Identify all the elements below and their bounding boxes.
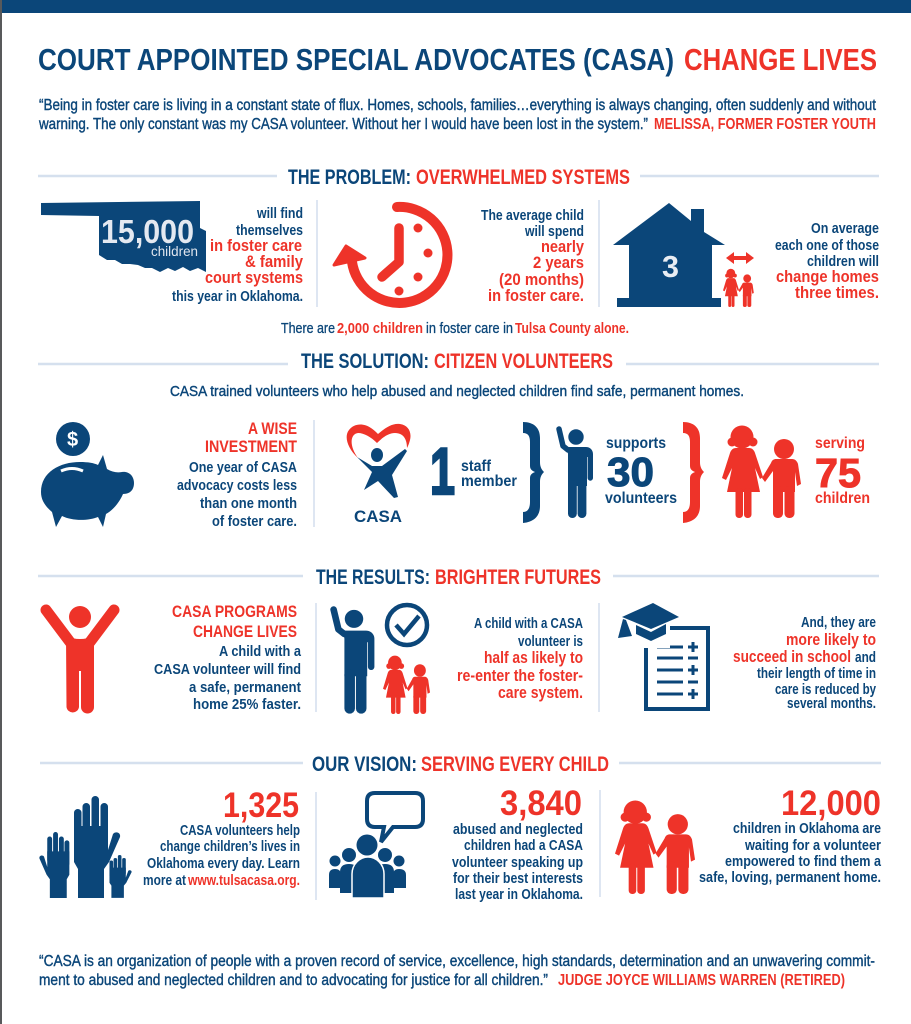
panel: time in care: [334, 207, 585, 305]
text: succeed in school: And, they are: [801, 615, 876, 631]
text: programs change lives: [154, 603, 302, 713]
panel: 15,000 children: [41, 201, 304, 305]
section heading: the solution: CITIZEN VOLUNTEERS: [434, 350, 613, 373]
intro quote: warning. The only constant was my CASA volunteer. Without her I would have been lost in the system.”: [38, 116, 648, 133]
text: three moves: change homes: [776, 268, 879, 286]
text: programs change lives: A child with a: [219, 644, 302, 660]
icon: navy brace: [523, 422, 544, 523]
icon: group with speech bubble: [329, 793, 423, 898]
Tulsa County note: There are: [281, 321, 335, 337]
statistic: 1,325: 1,325: [223, 786, 299, 825]
solution summary: CASA trained volunteers who help abused and neglected children find safe, permanent homes.: [170, 384, 744, 400]
text: succeed in school: and: [855, 650, 876, 666]
text: three moves: each one of those: [775, 238, 879, 254]
icon: person with arms raised: [46, 606, 114, 714]
text: succeed in school: care is reduced by: [775, 682, 876, 698]
intro quote: [38, 97, 877, 133]
text: 20 months: in foster care.: [488, 287, 584, 305]
text: foster care: & family: [245, 253, 304, 271]
text: half as likely: half as likely to: [484, 649, 583, 667]
text: 20 months: nearly: [541, 238, 585, 256]
Tulsa County note: 2,000 children: [337, 321, 423, 337]
icon: raised hands: [39, 796, 132, 898]
text: 20 months: The average child: [481, 208, 584, 224]
icon: double arrow: [726, 252, 754, 264]
text: foster care: in foster care: [210, 237, 302, 255]
section heading: our vision: SERVING EVERY CHILD: [421, 753, 609, 776]
text: speaking up: [452, 822, 583, 903]
text: foster care: will find: [256, 206, 303, 222]
Tulsa County note: [281, 321, 629, 337]
logo: CASA: [347, 424, 411, 526]
icon: children: [615, 800, 695, 894]
icon: children: [722, 426, 801, 518]
text: 20 months: (20 months): [499, 271, 584, 289]
icon: volunteer: [334, 610, 374, 714]
section heading: the solution: THE SOLUTION:: [301, 350, 429, 373]
closing quote: JUDGE JOYCE WILLIAMS WARREN (RETIRED): [558, 972, 845, 989]
text: children waiting: children in Oklahoma are: [733, 821, 881, 837]
text: succeed in school: succeed in school: [733, 648, 851, 666]
section heading: the results: [38, 566, 879, 589]
text: programs change lives: home 25% faster.: [193, 697, 301, 713]
text: speaking up: abused and neglected: [453, 822, 583, 838]
text: children waiting: empowered to find them a: [725, 854, 882, 870]
text: 20 months: [481, 208, 585, 305]
text: three moves: three times.: [795, 284, 879, 302]
statistic: 1 staff member: 1: [430, 434, 455, 508]
text: programs change lives: CASA volunteer will find: [154, 662, 301, 678]
section heading: the results: THE RESULTS:: [316, 566, 430, 589]
title: CHANGE LIVES: [684, 42, 877, 77]
icon: house: 3: [662, 249, 679, 284]
panel: half as likely: [334, 605, 583, 714]
statistic: 15,000 children: 15,000: [101, 213, 194, 250]
icon: children: [723, 269, 754, 307]
text: foster care: this year in Oklahoma.: [172, 289, 303, 305]
icon: red brace: [683, 422, 704, 523]
text: children waiting: [699, 821, 882, 886]
statistic: 15,000 children: children: [151, 244, 198, 259]
text: programs change lives: a safe, permanent: [189, 680, 301, 696]
Tulsa County note: in foster care in: [426, 321, 513, 337]
text: half as likely: care system.: [498, 684, 583, 702]
text: speaking up: volunteer speaking up: [452, 855, 583, 871]
text: wise investment: One year of CASA: [189, 460, 297, 476]
text: half as likely: [457, 616, 583, 702]
statistic: 30 volunteers: supports: [606, 435, 666, 452]
text: programs change lives: CASA PROGRAMS: [172, 603, 297, 621]
icon: piggy bank and coin: $: [67, 429, 78, 451]
statistic: 12,000: 12,000: [781, 784, 881, 823]
section heading: the problem: OVERWHELMED SYSTEMS: [416, 166, 630, 189]
statistic: 30 volunteers: 30: [607, 449, 654, 495]
title: COURT APPOINTED SPECIAL ADVOCATES (CASA): [38, 42, 674, 77]
text: wise investment: [177, 420, 297, 530]
panel: 12,000 waiting: [615, 784, 882, 894]
panel: success in school: [618, 603, 876, 712]
section heading: the problem: THE PROBLEM:: [288, 166, 411, 189]
statistic: 1 staff member: member: [461, 473, 517, 490]
text: succeed in school: several months.: [787, 696, 876, 712]
text: three moves: On average: [811, 221, 879, 237]
text: succeed in school: [733, 615, 876, 712]
text: children waiting: waiting for a volunteer: [744, 838, 881, 854]
text: half as likely: volunteer is: [518, 634, 583, 650]
closing quote: [39, 953, 875, 989]
icon: clock with return arrow: [334, 207, 447, 303]
panel: 3,840 children: [329, 784, 583, 903]
icon: piggy bank and coin: [41, 422, 134, 527]
text: wise investment: of foster care.: [212, 514, 297, 530]
statistic: 3,840: 3,840: [500, 784, 582, 823]
panel: programs change lives: [46, 603, 302, 714]
text: speaking up: last year in Oklahoma.: [455, 887, 583, 903]
text: succeed in school: more likely to: [786, 631, 876, 649]
statistic: 75 children: 75: [815, 450, 861, 496]
text: wise investment: advocacy costs less: [177, 478, 297, 494]
text: foster care: themselves: [236, 223, 303, 239]
text: volunteers help: www.tulsacasa.org.: [187, 873, 300, 889]
closing quote: ment to abused and neglected children and to advocating for justice for all children.”: [39, 972, 548, 989]
statistic: 30 volunteers: volunteers: [605, 490, 677, 507]
logo: CASA: CASA: [354, 507, 402, 526]
statistic: 75 children: serving: [815, 435, 865, 452]
text: three moves: [775, 221, 879, 302]
Tulsa County note: Tulsa County alone.: [515, 321, 629, 337]
text: 20 months: will spend: [524, 224, 584, 240]
left edge strip: [0, 0, 2, 1024]
statistic: 75 children: children: [815, 490, 870, 507]
panel: 1,325 volunteers: [39, 786, 300, 898]
text: wise investment: than one month: [200, 496, 297, 512]
icon: volunteer: [559, 429, 593, 518]
text: volunteers help: [143, 823, 300, 889]
section heading: our vision: [40, 753, 881, 776]
text: wise investment: INVESTMENT: [205, 438, 297, 456]
statistic: 1 staff member: staff: [461, 458, 492, 475]
section heading: the results: BRIGHTER FUTURES: [435, 566, 601, 589]
icon: graduation cap and checklist: [618, 603, 708, 709]
panel: changing homes: [613, 203, 879, 307]
text: foster care: court systems: [205, 269, 303, 287]
text: volunteers help: CASA volunteers help: [180, 823, 300, 839]
text: three moves: children will: [807, 254, 879, 270]
section heading: the solution: [38, 350, 879, 373]
section heading: the problem: [38, 166, 879, 189]
panel: CASA staffing ratio: [347, 422, 870, 526]
text: half as likely: A child with a CASA: [474, 616, 583, 632]
text: volunteers help: more at: [143, 873, 186, 889]
text: 20 months: 2 years: [533, 254, 584, 272]
text: volunteers help: change children’s lives in: [160, 839, 300, 855]
text: volunteers help: Oklahoma every day. Learn: [147, 856, 300, 872]
text: succeed in school: their length of time in: [757, 666, 876, 682]
statistic: 1 staff member: [430, 434, 517, 508]
text: speaking up: for their best interests: [453, 871, 583, 887]
icon: check mark circle: [387, 605, 427, 645]
section heading: our vision: OUR VISION:: [312, 753, 417, 776]
text: speaking up: children had a CASA: [464, 838, 583, 854]
text: children waiting: safe, loving, permanent home.: [699, 870, 881, 886]
top banner bar: [2, 0, 911, 13]
statistic: 30 volunteers: [605, 435, 677, 507]
icon: children: [383, 656, 430, 714]
text: foster care: [172, 206, 304, 305]
statistic: 75 children: [815, 435, 870, 507]
text: wise investment: A WISE: [248, 420, 297, 438]
text: half as likely: re-enter the foster-: [457, 667, 583, 685]
icon: house: [613, 203, 725, 307]
panel: wise investment: [41, 420, 297, 530]
text: programs change lives: CHANGE LIVES: [193, 623, 297, 641]
icon: Oklahoma map: [41, 201, 206, 272]
